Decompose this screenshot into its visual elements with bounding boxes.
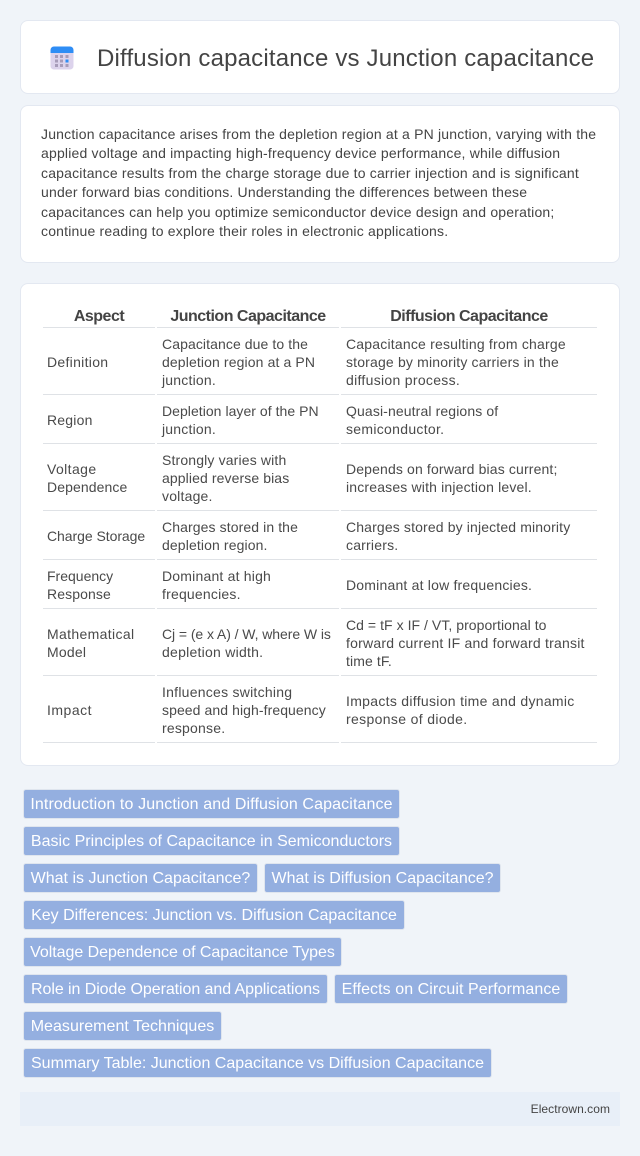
row: voltage dependence: applied reverse bias [162,470,289,486]
row: impact: Impacts diffusion time and dynamic [346,693,575,709]
row: definition [43,336,597,395]
link: summary table: Summary Table: Junction Capacitance vs Diffusion Capacitance [31,1055,484,1072]
link: voltage dependence: Voltage Dependence of Capacitance Types [30,944,335,961]
link: effects on circuit performance: Effects on Circuit Performance [342,981,560,998]
row: impact: speed and high-frequency [162,702,326,718]
intro text: Junction capacitance arises from the depletion region at a PN junction, varying with the [41,126,596,142]
link: voltage dependence [23,937,342,967]
row: mathematical model: depletion width. [162,644,263,660]
row: charge storage: Charges stored in the [162,519,298,535]
row: region: junction. [162,421,216,437]
link: basic principles: Basic Principles of Capacitance in Semiconductors [31,833,392,850]
link: introduction [23,789,400,819]
row: definition: junction. [162,372,216,388]
row: mathematical model [43,617,597,676]
link: what is junction capacitance [23,863,258,893]
link: measurement techniques: Measurement Techniques [31,1018,214,1035]
row: charge storage [43,519,597,560]
row: charge storage: Charge Storage [47,528,145,544]
row: charge storage: carriers. [346,537,398,553]
row: impact: Influences switching [162,684,292,700]
link: key differences [23,900,405,930]
link: what is diffusion capacitance: What is Diffusion Capacitance? [271,870,494,887]
icon: calendar [50,46,74,70]
row: region [43,403,597,444]
row: definition: Capacitance resulting from charge [346,336,566,352]
row: impact: response of diode. [346,711,468,727]
intro text: under forward bias conditions. Understanding the differences between these [41,184,527,200]
table header: Aspect [74,308,124,325]
link: role in diode operation [23,974,328,1004]
footer credit: Electrown.com [531,1102,610,1116]
row: definition: storage by minority carriers in the [346,354,559,370]
row: mathematical model: Cj = (e x A) / W, where W is [162,626,331,642]
panel: comparison table [20,283,620,766]
row: region: Region [47,412,93,428]
row: definition: depletion region at a PN [162,354,315,370]
row: mathematical model: Cd = tF x IF / VT, proportional to [346,617,547,633]
intro text: applied voltage and impacting high-frequency device performance, while diffusion [41,145,560,161]
row: voltage dependence: Strongly varies with [162,452,286,468]
link: role in diode operation: Role in Diode Operation and Applications [31,981,320,998]
topic links [23,789,568,1078]
row: impact: Impact [47,702,92,718]
row: definition: Definition [47,354,108,370]
row: charge storage: Charges stored by injected minority [346,519,570,535]
row: charge storage: depletion region. [162,537,268,553]
link: effects on circuit performance [334,974,568,1004]
row: voltage dependence: increases with injection level. [346,479,532,495]
row: voltage dependence: Dependence [47,479,127,495]
link: what is diffusion capacitance [264,863,501,893]
row: region: Depletion layer of the PN [162,403,319,419]
link: measurement techniques [23,1011,222,1041]
table header [43,308,597,328]
row: voltage dependence: Voltage [47,461,97,477]
table header: Junction Capacitance [170,308,326,325]
intro text: capacitance results from the charge storage due to carrier injection and is significant [41,165,579,181]
row: frequency response [43,568,597,609]
row: voltage dependence: Depends on forward bias current; [346,461,557,477]
row: voltage dependence [43,452,597,511]
footer [20,1092,620,1126]
intro text [41,126,596,239]
table header: Diffusion Capacitance [390,308,548,325]
row: frequency response: frequencies. [162,586,241,602]
row: mathematical model: time tF. [346,653,392,669]
link: basic principles [23,826,400,856]
row: definition: diffusion process. [346,372,460,388]
row: impact: response. [162,720,225,736]
header card [20,20,620,94]
row: frequency response: Frequency [47,568,113,584]
row: frequency response: Dominant at high [162,568,271,584]
row: region: Quasi-neutral regions of [346,403,498,419]
row: frequency response: Dominant at low frequencies. [346,577,532,593]
row: mathematical model: forward current IF and forward transit [346,635,585,651]
row: voltage dependence: voltage. [162,488,213,504]
link: summary table [23,1048,492,1078]
row: mathematical model: Mathematical [47,626,134,642]
intro text: capacitances can help you optimize semiconductor device design and operation; [41,204,554,220]
row: definition: Capacitance due to the [162,336,308,352]
row: mathematical model: Model [47,644,86,660]
intro text: continue reading to explore their roles in electronic applications. [41,223,448,239]
panel: introduction [20,105,620,263]
row: frequency response: Response [47,586,111,602]
row: impact [43,684,597,743]
title: Diffusion capacitance vs Junction capacitance [97,45,594,72]
link: what is junction capacitance: What is Junction Capacitance? [31,870,250,887]
link: key differences: Key Differences: Junction vs. Diffusion Capacitance [31,907,397,924]
row: region: semiconductor. [346,421,444,437]
link: introduction: Introduction to Junction and Diffusion Capacitance [30,796,393,813]
